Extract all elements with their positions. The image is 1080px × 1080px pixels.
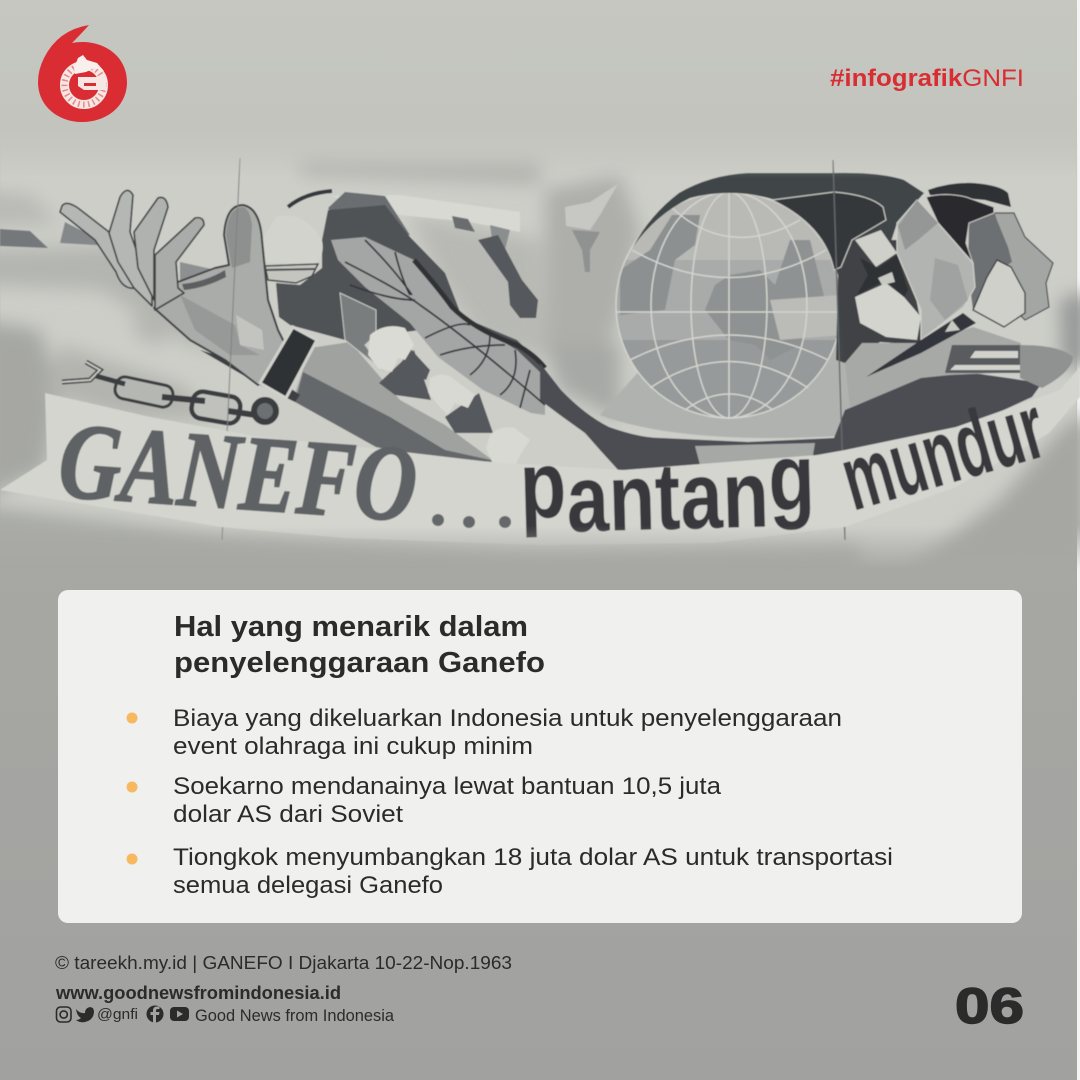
- forearm sleeve: [293, 342, 495, 462]
- middle finger: [134, 197, 168, 300]
- logo ring texture: [64, 66, 104, 104]
- bullet three: Tiongkok menyumbangkan 18 juta dolar AS untuk transportasi: [173, 844, 893, 871]
- bullet two: dolar AS dari Soviet: [173, 801, 403, 828]
- source credit: © tareekh.my.id | GANEFO I Djakarta 10-22-Nop.1963: [55, 953, 512, 973]
- bullet three: semua delegasi Ganefo: [173, 872, 443, 899]
- collar dark V: [866, 313, 976, 377]
- icon: instagram: [56, 1007, 71, 1022]
- heads group: [633, 173, 1073, 408]
- icon: youtube: [170, 1007, 189, 1021]
- head 1: [855, 230, 897, 267]
- panel heading: penyelenggaraan Ganefo: [174, 647, 545, 679]
- dark swoop beneath globe: [540, 363, 1042, 472]
- palm shade: [236, 315, 264, 350]
- vertical panel seams: [222, 158, 240, 540]
- mural base: [0, 120, 1077, 570]
- carnation flowers: [368, 326, 414, 372]
- GANEFO lettering: GANEFO: [55, 401, 421, 545]
- bullet one: Biaya yang dikeluarkan Indonesia untuk penyelenggaraan: [173, 705, 842, 732]
- eagle head: [74, 55, 104, 74]
- bullet two: Soekarno mendanainya lewat bantuan 10,5 juta: [173, 773, 721, 800]
- page name: Good News from Indonesia: [195, 1006, 395, 1025]
- dark leaves: [379, 350, 431, 400]
- logo ring: [64, 66, 104, 104]
- bullet one: event olahraga ini cukup minim: [173, 733, 533, 760]
- bullet two: [126, 773, 721, 828]
- social row: [56, 1006, 395, 1025]
- laurel branch: [331, 237, 545, 465]
- hand palm: [154, 205, 288, 385]
- pinky: [60, 203, 135, 288]
- bullet three: [126, 844, 893, 899]
- logo: [38, 25, 127, 122]
- panel background: [58, 590, 1022, 923]
- striped sleeve: [945, 345, 1020, 373]
- page number: 06: [955, 978, 1024, 1034]
- flag upper stripe: [330, 195, 520, 232]
- banner: [0, 367, 1080, 545]
- cuff: [260, 327, 317, 398]
- chain: [62, 362, 276, 425]
- ellipsis dots: [432, 514, 511, 528]
- leaf band: [331, 237, 545, 415]
- white right edge: [1077, 0, 1080, 1080]
- leaf under flower: [338, 292, 378, 362]
- head 3 hair: [926, 194, 994, 263]
- dark behind face: [838, 240, 925, 363]
- dove shape: [565, 184, 618, 230]
- drum: [321, 240, 324, 253]
- index finger: [155, 218, 204, 310]
- background cloud shapes: [0, 160, 1080, 590]
- website: www.goodnewsfromindonesia.id: [55, 982, 341, 1003]
- outlined hair: [772, 192, 886, 270]
- outer dark hair sweep: [633, 173, 924, 363]
- panel: fakta: [58, 590, 1022, 923]
- grey oval: [1020, 345, 1073, 388]
- icon: facebook: [146, 1006, 164, 1023]
- hashtag: #infografik GNFI: [830, 65, 1024, 92]
- logo mark: [38, 25, 127, 122]
- top dark blob: [928, 183, 1011, 207]
- handle: @gnfi: [97, 1006, 138, 1023]
- bullet one: [126, 705, 842, 760]
- dark drip: [478, 235, 538, 318]
- letter G: [78, 77, 106, 90]
- grey body: [845, 327, 1021, 408]
- grey behind fingers: [180, 262, 210, 281]
- grey body behind globe: [600, 340, 855, 438]
- left dark streak: [0, 229, 48, 248]
- head 3: [968, 213, 1012, 310]
- globe: [615, 192, 838, 420]
- thumb shade: [226, 207, 252, 268]
- pantang lettering: antan: [565, 442, 770, 553]
- ring finger: [109, 190, 152, 306]
- dark area behind hand: [276, 205, 540, 385]
- panel heading: [174, 611, 545, 679]
- pantang lettering: g: [767, 424, 816, 531]
- lower tab: [695, 443, 815, 465]
- panel heading: Hal yang menarik dalam: [174, 611, 528, 643]
- arm and hand: [60, 190, 500, 462]
- head 2: [897, 200, 975, 340]
- head 4: [994, 213, 1053, 320]
- mural: GANEFO pantang mundur: [0, 156, 1080, 564]
- pantang lettering: p: [518, 432, 567, 539]
- icon: twitter: [76, 1007, 94, 1022]
